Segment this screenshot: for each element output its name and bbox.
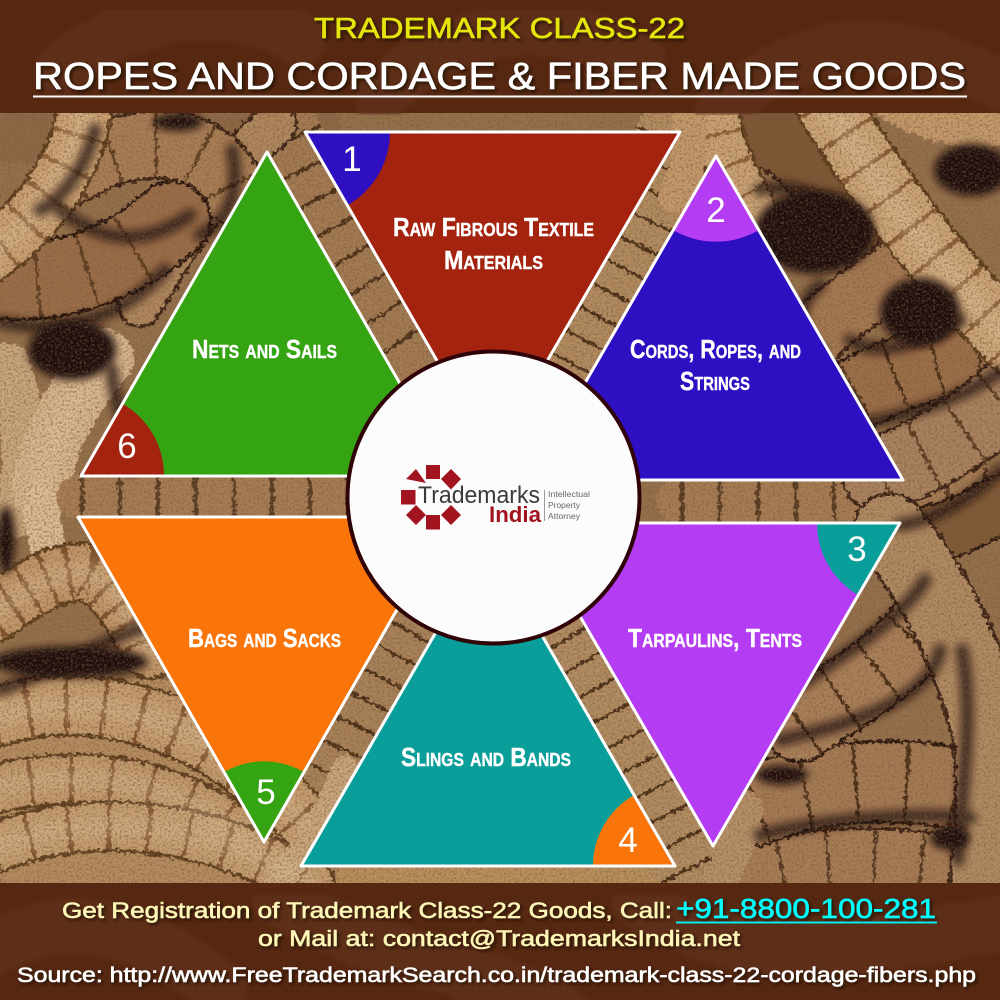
label: Tarpaulins, Tents [628, 623, 802, 653]
center circle with logo [348, 352, 640, 644]
label [393, 212, 594, 275]
label [630, 334, 801, 396]
panel 1: raw fibrous textile materials [305, 132, 680, 456]
number badge 6 [81, 404, 164, 476]
number badge 4 [593, 795, 675, 866]
background: rope photo [0, 100, 1000, 900]
outline [81, 152, 453, 476]
label: Slings and Bands [401, 742, 571, 772]
panel 4: slings and bands [301, 542, 675, 866]
panel 3: tarpaulins, tents [526, 523, 900, 846]
soft highlights along bright ropes [0, 100, 1000, 885]
logo: Trademarks India: India [489, 502, 542, 527]
call to action line: Get Registration of Trademark Class-22 Goods, Call: [62, 898, 672, 923]
logo tagline [548, 489, 590, 521]
outline [301, 542, 675, 866]
logo: Trademarks India [401, 465, 590, 530]
label: Materials [444, 245, 543, 275]
label: Raw Fibrous Textile [393, 212, 594, 242]
logo tagline: Property [548, 500, 581, 510]
number badge 2 [673, 156, 759, 242]
outline [526, 523, 900, 846]
logo mark [401, 465, 461, 530]
panel 2: cords, ropes and strings [529, 156, 903, 480]
title: ROPES AND CORDAGE & FIBER MADE GOODS [33, 56, 966, 98]
logo tagline: Attorney [548, 511, 581, 521]
number 3: 3 [847, 530, 867, 569]
logo wordmark: Trademarks [418, 482, 540, 509]
number badge 1 [305, 132, 390, 205]
header band [0, 0, 1000, 113]
dark shadows between ropes [0, 113, 1000, 850]
triangle [81, 152, 453, 476]
panel 5: bags and sacks [78, 517, 450, 842]
footer band [0, 883, 1000, 1000]
label: Nets and Sails [192, 334, 337, 364]
label: Cords, Ropes, and [630, 334, 801, 364]
logo tagline: Intellectual [548, 489, 590, 499]
number 1: 1 [342, 140, 362, 179]
number 5: 5 [256, 773, 276, 812]
label: Strings [680, 366, 750, 396]
mail line: or Mail at: contact@TrademarksIndia.net [258, 926, 740, 951]
triangle [526, 523, 900, 846]
triangle [529, 156, 903, 480]
number 4: 4 [618, 821, 638, 860]
outline [529, 156, 903, 480]
source line: Source: http://www.FreeTrademarkSearch.co.in/trademark-class-22-cordage-fibers.php [17, 964, 976, 987]
label: Bags and Sacks [188, 623, 341, 653]
number 6: 6 [117, 427, 137, 466]
subtitle: TRADEMARK CLASS-22 [314, 13, 685, 45]
outline [305, 132, 680, 456]
outline [78, 517, 450, 842]
number badge 3 [817, 523, 900, 595]
panel 6: nets and sails [81, 152, 453, 476]
call to action line [62, 893, 937, 924]
number 2: 2 [706, 191, 726, 230]
triangle [78, 517, 450, 842]
soft seams between ropes [0, 130, 1000, 860]
triangle [305, 132, 680, 456]
call to action line: +91-8800-100-281 [676, 893, 936, 924]
number badge 5 [224, 761, 304, 842]
triangle [301, 542, 675, 866]
